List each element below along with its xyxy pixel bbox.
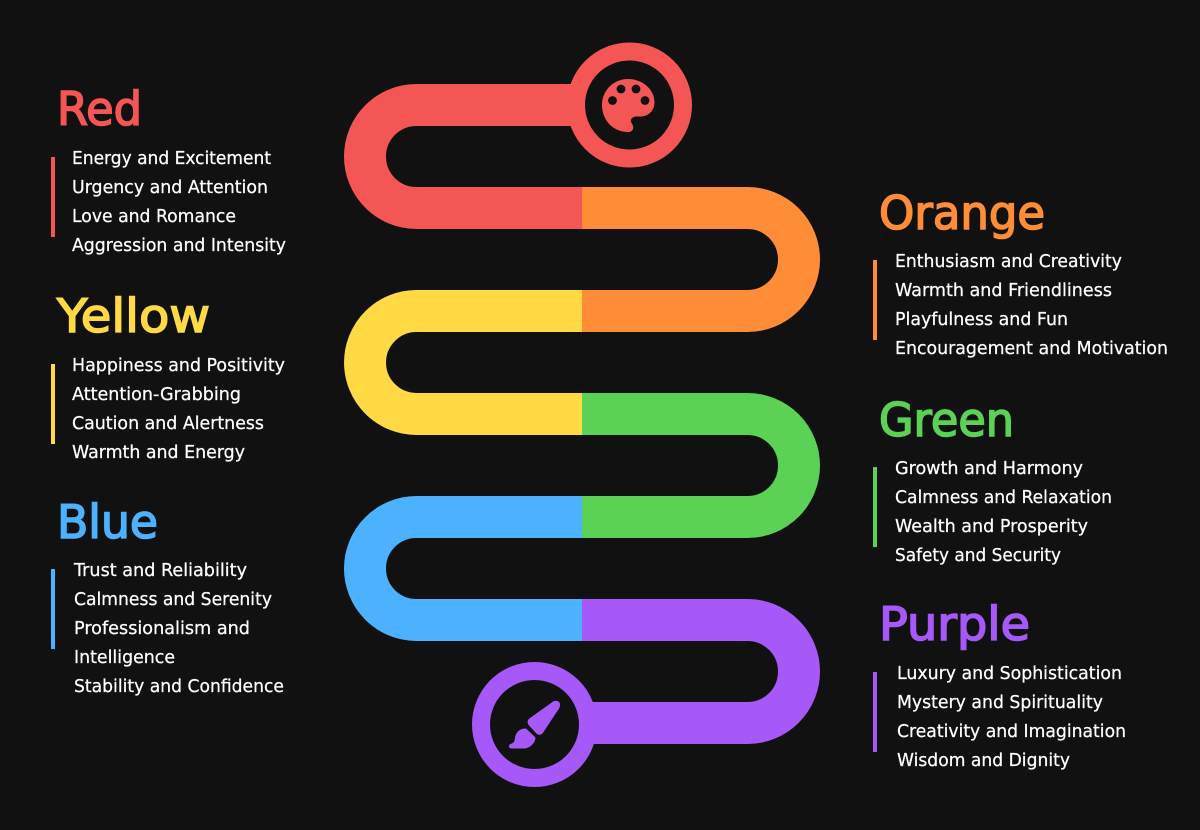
list: purple meanings: Luxury and Sophistication — [897, 663, 1122, 684]
panel: green — [873, 393, 1112, 566]
list: blue meanings: Intelligence — [74, 647, 175, 668]
list: green meanings: Safety and Security — [895, 545, 1061, 566]
list: blue meanings: Calmness and Serenity — [74, 589, 272, 610]
list: green meanings: Growth and Harmony — [895, 458, 1083, 479]
panel: yellow — [51, 289, 285, 463]
list: yellow meanings: Attention-Grabbing — [72, 384, 241, 405]
list: purple meanings — [897, 663, 1126, 771]
list: yellow meanings: Caution and Alertness — [72, 413, 264, 434]
panel: red — [51, 82, 286, 256]
heading: Blue: Blue — [57, 495, 158, 549]
list: green meanings: Wealth and Prosperity — [895, 516, 1088, 537]
heading: Red: Red — [57, 82, 142, 136]
list: green meanings — [895, 458, 1112, 566]
icon: paintbrush badge — [481, 671, 588, 778]
list: blue meanings — [73, 560, 284, 697]
road segment: red — [365, 105, 629, 208]
list: yellow meanings: Happiness and Positivity — [72, 355, 285, 376]
list: orange meanings — [895, 251, 1168, 359]
icon: palette badge — [576, 52, 683, 158]
list: red meanings: Aggression and Intensity — [72, 235, 286, 256]
list: red meanings: Energy and Excitement — [72, 148, 271, 169]
road segment: orange — [582, 208, 799, 311]
list: orange meanings: Encouragement and Motivation — [895, 338, 1168, 359]
list: green meanings: Calmness and Relaxation — [895, 487, 1112, 508]
list: red meanings — [72, 148, 286, 256]
road segment: yellow — [365, 311, 582, 414]
accent bar: orange — [873, 260, 877, 340]
list: purple meanings: Mystery and Spirituality — [897, 692, 1103, 713]
list: blue meanings: Professionalism and — [74, 618, 250, 639]
accent bar: blue — [51, 569, 55, 649]
list: orange meanings: Enthusiasm and Creativity — [895, 251, 1122, 272]
list: orange meanings: Warmth and Friendliness — [895, 280, 1112, 301]
accent bar: red — [51, 157, 55, 237]
heading: Green: Green — [879, 393, 1014, 447]
list: orange meanings: Playfulness and Fun — [895, 309, 1068, 330]
list: yellow meanings — [72, 355, 285, 463]
accent bar: purple — [873, 672, 877, 752]
heading: Purple: Purple — [879, 597, 1030, 651]
list: yellow meanings: Warmth and Energy — [72, 442, 245, 463]
list: blue meanings: Stability and Confidence — [74, 676, 284, 697]
road segment: purple — [534, 620, 799, 723]
heading: Orange: Orange — [879, 186, 1045, 240]
list: purple meanings: Wisdom and Dignity — [897, 750, 1070, 771]
accent bar: yellow — [51, 364, 55, 444]
accent bar: green — [873, 467, 877, 547]
panel: orange — [873, 186, 1168, 359]
panel: blue — [51, 495, 284, 697]
panel: purple — [873, 597, 1126, 771]
heading: Yellow: Yellow — [56, 289, 210, 343]
list: blue meanings: Trust and Reliability — [73, 560, 247, 581]
list: red meanings: Love and Romance — [72, 206, 236, 227]
winding colour road — [365, 105, 799, 723]
road segment: blue — [365, 517, 582, 620]
road segment: green — [582, 414, 799, 517]
list: red meanings: Urgency and Attention — [72, 177, 268, 198]
list: purple meanings: Creativity and Imagination — [897, 721, 1126, 742]
